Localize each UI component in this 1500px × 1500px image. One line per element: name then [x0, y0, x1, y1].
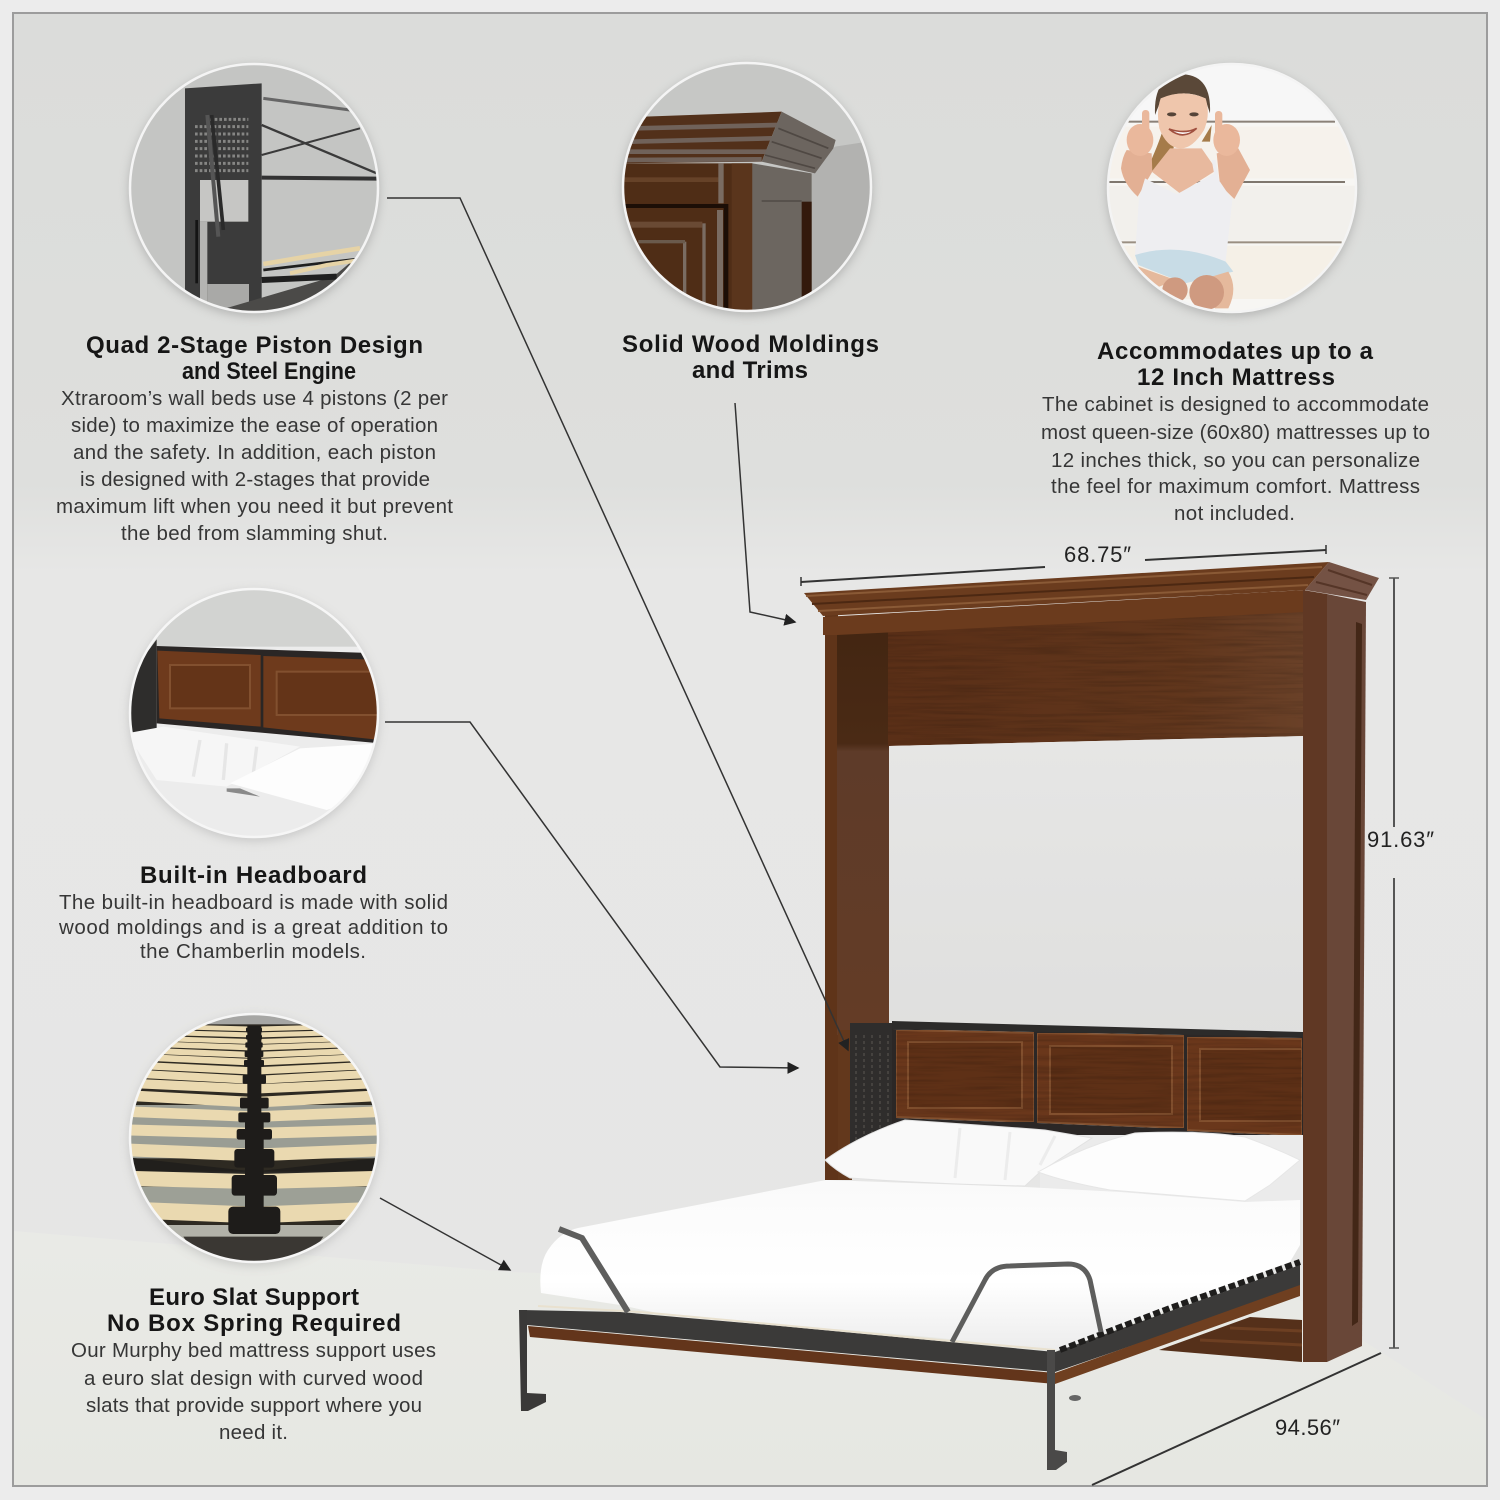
text block: headboard: The built-in headboard is made with solid	[59, 891, 448, 914]
dimension: width 68.75: 68.75″	[1064, 542, 1131, 567]
right pillar	[1303, 590, 1327, 1362]
heading: mattress	[1097, 338, 1374, 391]
heading: mattress: Accommodates up to a	[1097, 338, 1374, 365]
text block: mattress: The cabinet is designed to accommodate	[1042, 393, 1429, 416]
text block: headboard: wood moldings and is a great addition to	[58, 916, 448, 939]
cabinet	[804, 562, 1379, 1362]
arrow: headboard leader	[385, 722, 798, 1068]
heading: piston design	[86, 332, 423, 385]
heading: euro slats: Euro Slat Support	[149, 1284, 359, 1311]
right arm	[1217, 148, 1250, 199]
text block: euro slats: need it.	[219, 1421, 288, 1444]
text block: piston design: maximum lift when you need it but prevent	[56, 495, 453, 518]
text block: mattress: most queen-size (60x80) mattresses up to	[1041, 421, 1430, 444]
heading: euro slats	[107, 1284, 401, 1337]
text block: piston design: is designed with 2-stages that provide	[80, 468, 430, 491]
heading: solid wood moldings: Solid Wood Moldings	[622, 331, 879, 358]
fascia	[823, 590, 1305, 635]
icon: piston circle photo	[120, 60, 390, 320]
text block: headboard	[58, 862, 448, 963]
steel bed frame	[519, 1262, 1300, 1470]
arrow: piston leader	[387, 198, 848, 1050]
heading: solid wood moldings	[622, 331, 879, 384]
text block: mattress	[1041, 338, 1430, 525]
header panel	[888, 606, 1305, 746]
icon: moldings circle photo	[615, 60, 880, 320]
mattress	[540, 1180, 1300, 1350]
icon: headboard circle photo	[120, 580, 390, 845]
panel 2	[1037, 1033, 1184, 1128]
text block: piston design	[56, 332, 453, 545]
text block: piston design: Xtraroom’s wall beds use 4 pistons (2 per	[61, 387, 448, 410]
text block: euro slats	[71, 1284, 436, 1444]
dimension: height 91.63: 91.63″	[1367, 827, 1434, 852]
dimension: depth 94.56: 94.56″	[1275, 1415, 1340, 1440]
heading: built-in headboard: Built-in Headboard	[140, 862, 367, 889]
dimension: depth 94.56	[1092, 1353, 1381, 1485]
icon: mattress woman circle photo	[1095, 55, 1365, 320]
text block: mattress: 12 inches thick, so you can personalize	[1051, 449, 1420, 472]
heading: mattress: 12 Inch Mattress	[1137, 364, 1335, 391]
heading: solid wood moldings: and Trims	[692, 357, 808, 384]
text block: piston design: and the safety. In addition, each piston	[73, 441, 436, 464]
legs	[519, 1310, 546, 1411]
text block: euro slats: Our Murphy bed mattress support uses	[71, 1339, 436, 1362]
retaining straps	[559, 1229, 1101, 1342]
left stile	[825, 615, 838, 1180]
pillows	[825, 1120, 1303, 1220]
heading: euro slats: No Box Spring Required	[107, 1310, 401, 1337]
text block: euro slats: slats that provide support where you	[86, 1394, 422, 1417]
text block: euro slats: a euro slat design with curved wood	[84, 1367, 423, 1390]
text block: headboard: the Chamberlin models.	[140, 940, 366, 963]
panel 3	[1187, 1037, 1302, 1135]
inner side panel	[837, 630, 889, 1035]
left arm	[1121, 150, 1152, 197]
wood trim	[528, 1326, 1055, 1384]
text block: piston design: the bed from slamming shut.	[121, 522, 388, 545]
arrow: moldings leader	[735, 403, 795, 622]
arrow: slats leader	[380, 1198, 510, 1270]
crown molding	[804, 562, 1329, 616]
text block: mattress: not included.	[1174, 502, 1295, 525]
text block: piston design: side) to maximize the ease of operation	[71, 414, 438, 437]
opening	[888, 736, 1305, 1040]
dimension: width 68.75	[801, 542, 1326, 586]
icon: euro slats circle photo	[120, 1005, 390, 1266]
headboard	[850, 1021, 1303, 1160]
heading: piston design: and Steel Engine	[182, 358, 356, 385]
murphy bed illustration	[519, 562, 1379, 1470]
panel 1	[896, 1030, 1034, 1122]
heading: piston design: Quad 2-Stage Piston Design	[86, 332, 423, 359]
lower base	[1159, 1317, 1302, 1362]
text block: mattress: the feel for maximum comfort. Mattress	[1051, 475, 1420, 498]
